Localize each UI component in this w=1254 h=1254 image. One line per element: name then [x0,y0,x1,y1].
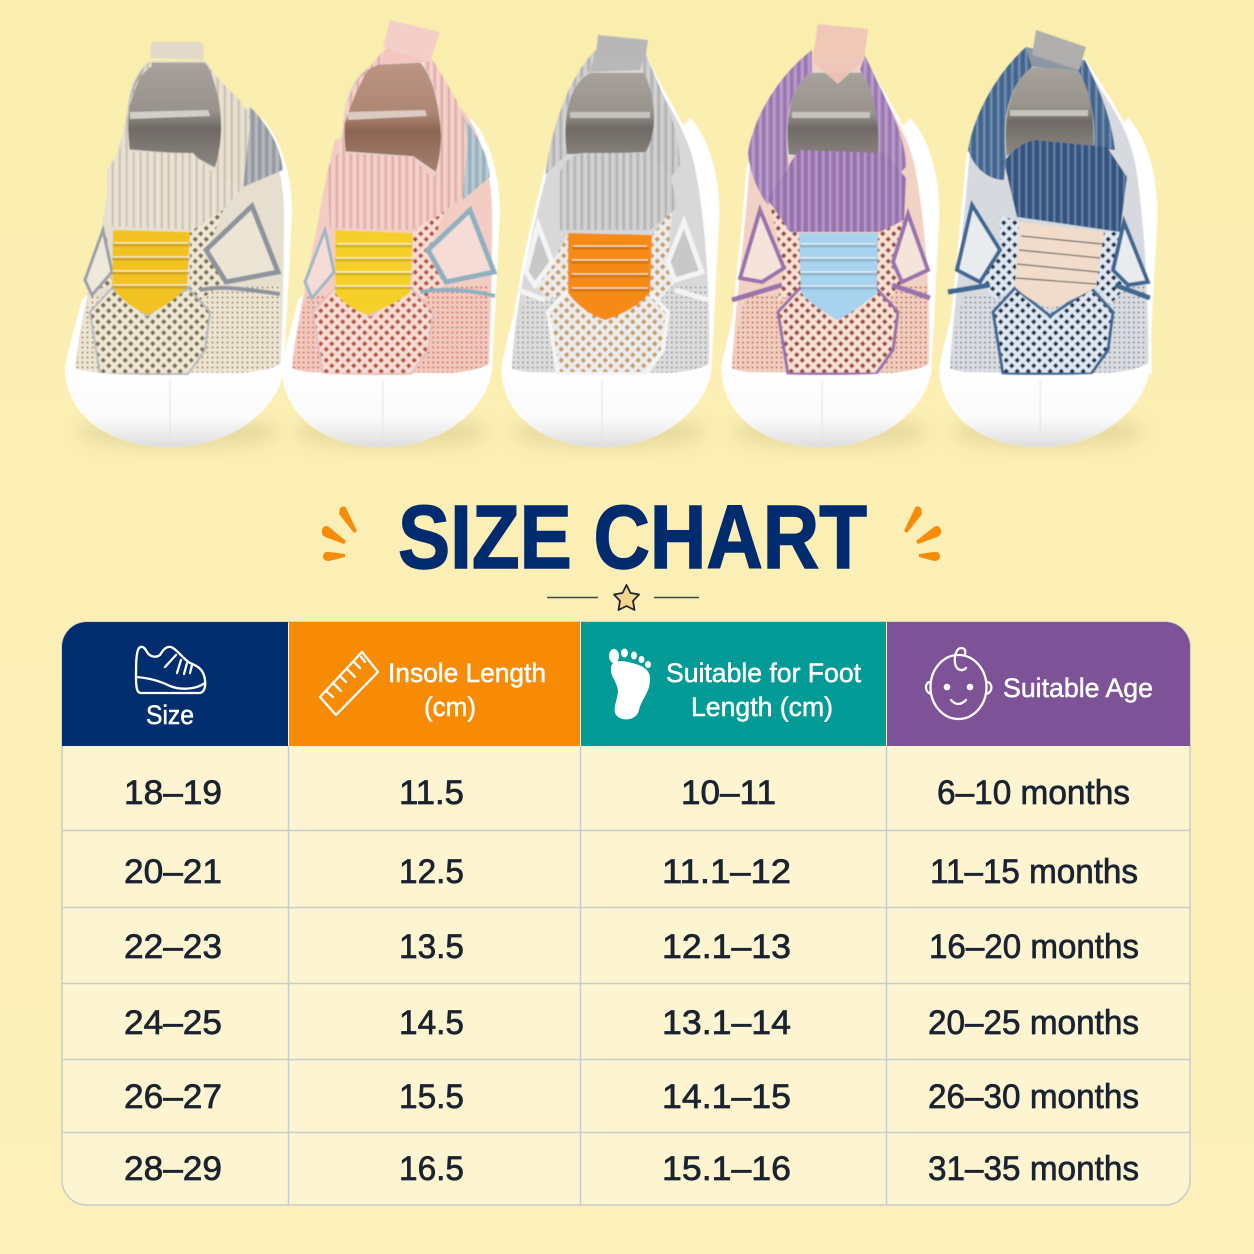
icon: foot [609,648,651,719]
row: size 24-25 [124,1004,1139,1042]
table grid lines [62,746,1190,1205]
header: Suitable Age: Suitable Age [1003,673,1153,703]
header: Suitable Age [887,622,1190,746]
icon: right sparks [904,506,941,561]
header: Insole Length [289,622,580,746]
row: size 18-19: 10–11 [681,774,776,812]
row: size 24-25: 14.5 [399,1004,464,1042]
row: size 20-21: 11–15 months [930,853,1138,891]
row: size 24-25: 20–25 months [928,1004,1139,1042]
shoe: purple with blue laces [721,24,939,448]
row: size 22-23: 22–23 [124,928,222,966]
shoes row [65,20,1157,448]
row: size 26-27: 15.5 [399,1078,464,1116]
row: size 26-27: 26–30 months [928,1078,1139,1116]
row: size 26-27: 14.1–15 [662,1078,791,1116]
shoe: beige with yellow laces [65,42,292,448]
header: Insole Length: (cm) [424,692,476,722]
row: size 26-27 [124,1078,1139,1116]
header: Suitable for Foot Length: Length (cm) [691,692,833,722]
shoe: grey with orange laces [501,35,719,448]
header: Suitable for Foot Length [581,622,886,746]
row: size 22-23: 16–20 months [929,928,1139,966]
shoe: navy with cream laces [939,30,1157,448]
row: size 18-19: 11.5 [399,774,464,812]
row: size 28-29: 31–35 months [928,1150,1139,1188]
header: Size [62,622,288,746]
row: size 18-19 [124,774,1130,812]
divider with star [547,585,699,610]
icon: baby face [926,648,991,719]
row: size 22-23: 13.5 [399,928,464,966]
icon: star [614,585,639,610]
row: size 28-29 [124,1150,1139,1188]
row: size 20-21 [124,853,1138,891]
icon: sneaker [136,647,205,693]
row: size 20-21: 12.5 [399,853,464,891]
icon: left sparks [322,506,357,561]
row: size 28-29: 15.1–16 [662,1150,791,1188]
row: size 26-27: 26–27 [124,1078,222,1116]
title: SIZE CHART [398,488,867,588]
header: Suitable for Foot Length: Suitable for Foot [666,658,861,688]
row: size 20-21: 11.1–12 [662,853,791,891]
row: size 28-29: 28–29 [124,1150,222,1188]
shoe: pink with yellow laces [282,20,500,448]
row: size 20-21: 20–21 [124,853,222,891]
row: size 24-25: 24–25 [124,1004,222,1042]
header: Size: Size [146,700,194,730]
header: Insole Length: Insole Length [388,658,546,688]
row: size 18-19: 6–10 months [937,774,1130,812]
row: size 24-25: 13.1–14 [662,1004,791,1042]
row: size 22-23 [124,928,1139,966]
size table [62,622,1190,1205]
table body [62,622,1190,1205]
row: size 22-23: 12.1–13 [662,928,791,966]
row: size 18-19: 18–19 [124,774,222,812]
icon: ruler [320,652,378,715]
row: size 28-29: 16.5 [399,1150,464,1188]
